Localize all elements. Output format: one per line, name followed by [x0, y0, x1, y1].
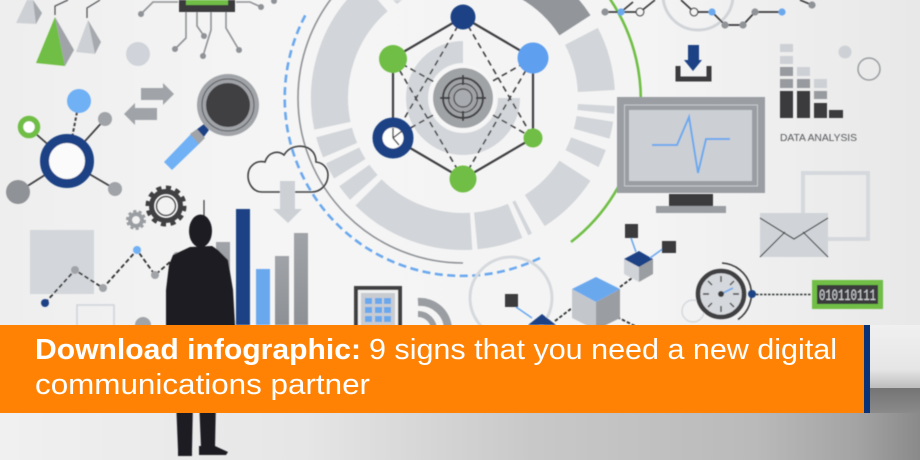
person silhouette — [166, 200, 235, 456]
binary display — [812, 280, 883, 309]
icon: wifi arcs — [418, 302, 448, 330]
icon: monitor with pulse — [617, 97, 765, 213]
node: navy ring lower left — [378, 122, 408, 154]
panel: pale square — [30, 230, 94, 294]
icon: pyramids — [16, 0, 101, 66]
dashed connections — [393, 17, 533, 179]
data analysis label: DATA ANALYSIS — [780, 132, 857, 144]
icon: gauge — [682, 263, 812, 322]
icon: magnifying glass — [164, 74, 259, 170]
decorative circles — [838, 46, 880, 80]
hexagon network with target — [378, 4, 548, 192]
heading second line: communications partner — [35, 369, 371, 401]
icon: cloud — [248, 146, 328, 192]
small outline square and half circle — [77, 305, 151, 333]
banner: orange title bar — [0, 325, 870, 413]
icon: hub and spokes — [6, 89, 122, 204]
cube network — [505, 224, 676, 330]
blue dashed arc — [285, 14, 540, 276]
icon: large gear — [148, 188, 184, 224]
node: navy top — [450, 4, 476, 30]
banner accent — [864, 325, 870, 413]
binary display: 010110111 — [819, 287, 876, 305]
bar chart — [216, 209, 308, 325]
node: green bottom — [450, 166, 476, 192]
gray thin arc — [298, 0, 628, 263]
icon: download arrow under cloud — [273, 181, 302, 223]
radial diagram: concentric ring segments — [274, 0, 652, 287]
top network line — [601, 0, 816, 30]
small cube — [624, 224, 676, 282]
line chart — [41, 246, 181, 307]
target icon — [430, 65, 496, 131]
big cube — [572, 277, 620, 330]
node: green upper left — [379, 45, 407, 73]
icon: tablet — [354, 286, 402, 330]
green arc — [571, 0, 641, 242]
node: blue upper right — [518, 42, 548, 74]
icon: download tray — [678, 45, 709, 79]
heading regular: 9 signs that you need a new digital — [369, 334, 837, 366]
dashed links — [555, 278, 635, 326]
large pale circle — [470, 257, 552, 339]
hexagon outline — [393, 17, 533, 179]
inner ring — [417, 52, 509, 144]
icon: exchange arrows — [124, 83, 174, 125]
icon: pale circle — [126, 42, 150, 66]
icon: microchip — [138, 0, 277, 59]
node: green lower right — [524, 128, 542, 148]
navy cube top — [505, 294, 556, 325]
heading bold: Download infographic: — [35, 334, 361, 366]
icon: small gear — [128, 212, 144, 228]
data analysis bars — [780, 44, 843, 118]
icon: envelope with frame — [760, 173, 868, 257]
